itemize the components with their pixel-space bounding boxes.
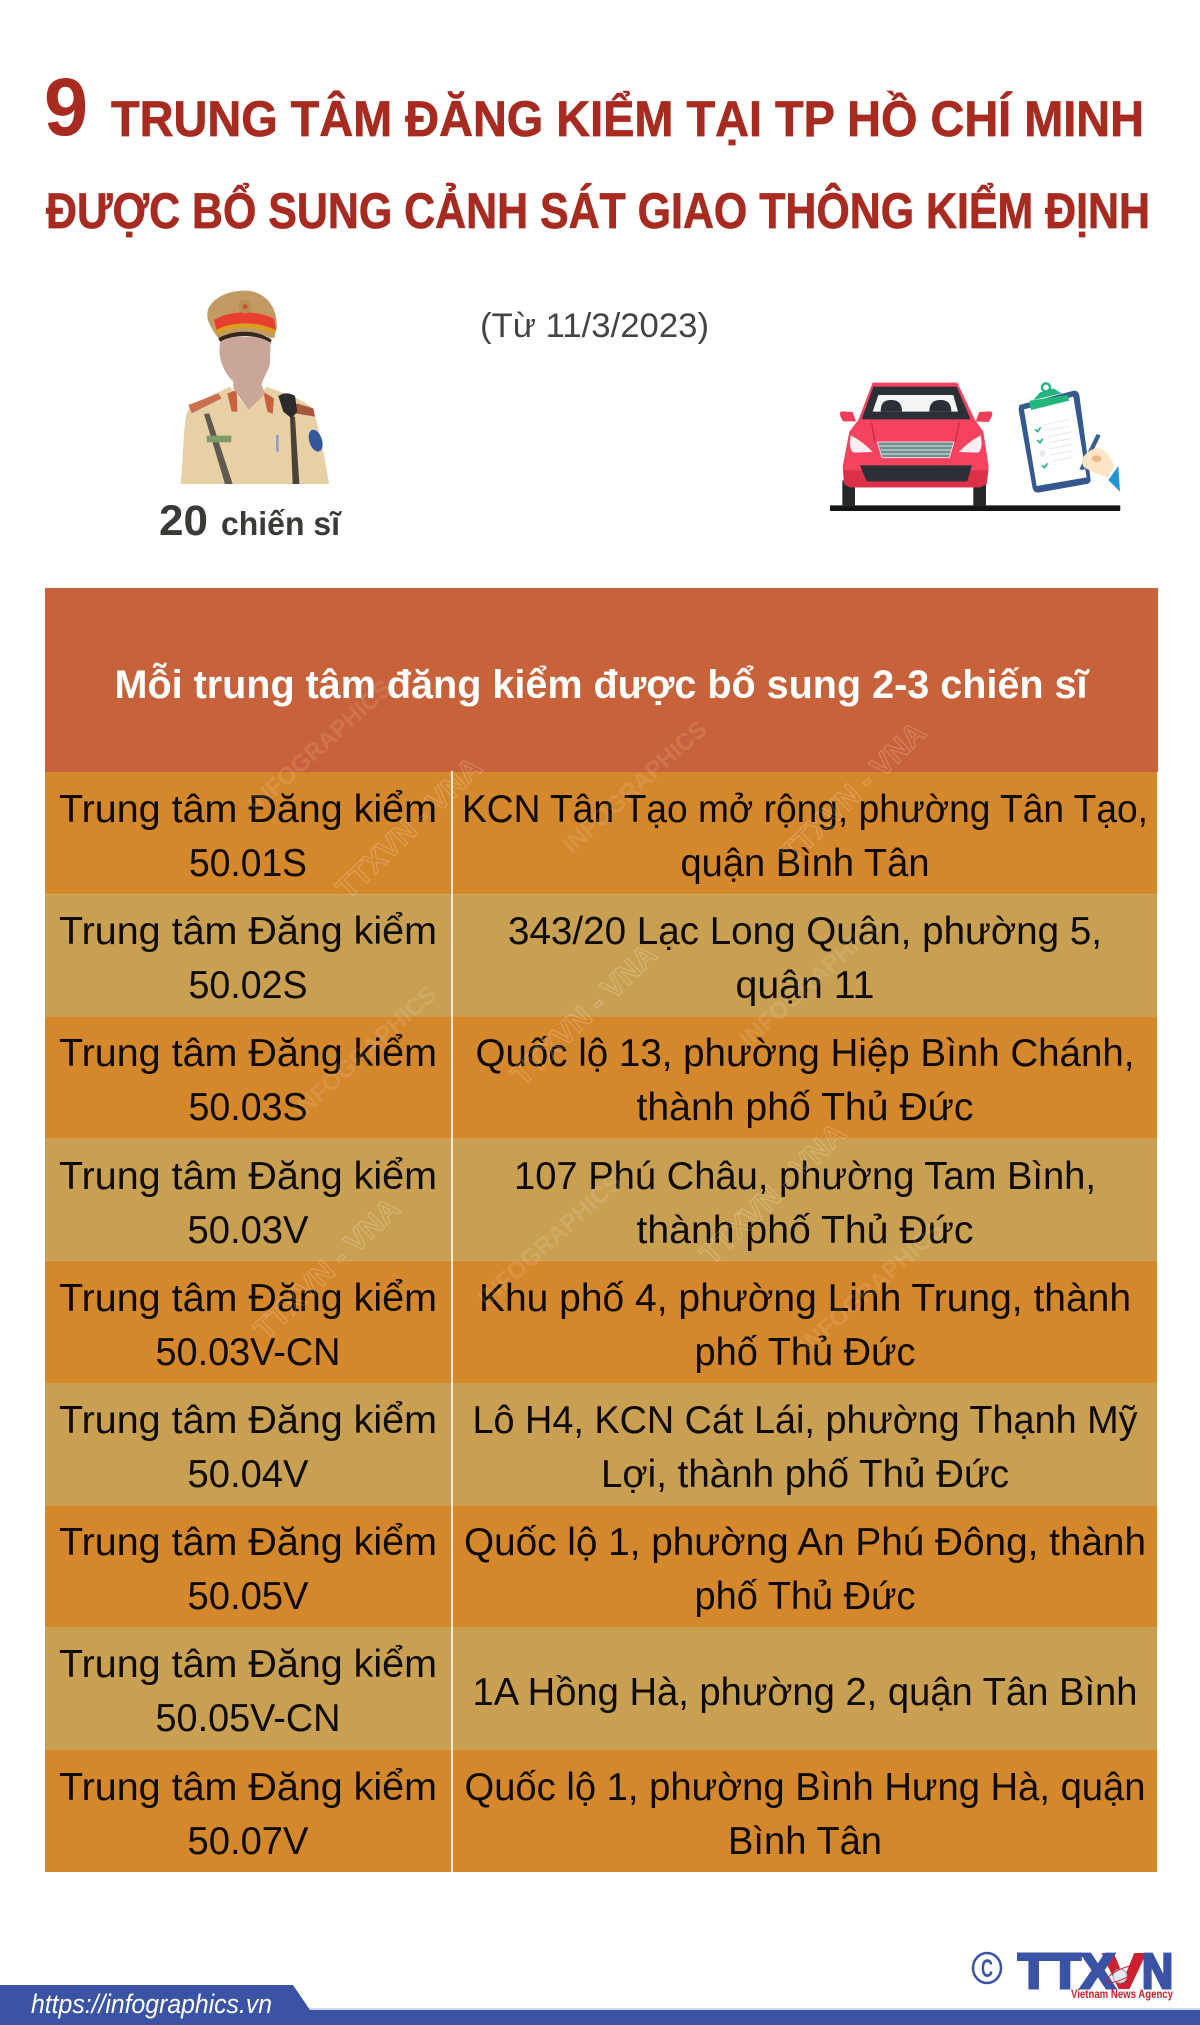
watermarks: TTXVN - VNA xyxy=(505,938,664,1092)
watermarks: INFOGRAPHICS xyxy=(288,981,442,1124)
row 7: phố Thủ Đức xyxy=(694,1575,916,1618)
row 7: Quốc lộ 1, phường An Phú Đông, thành xyxy=(464,1521,1146,1564)
row 2 xyxy=(45,894,1157,1016)
row 2: Trung tâm Đăng kiểm xyxy=(59,910,437,953)
row 4 xyxy=(45,1139,1157,1261)
row 3: Quốc lộ 13, phường Hiệp Bình Chánh, xyxy=(476,1032,1134,1075)
row 2: 50.02S xyxy=(188,964,308,1007)
row 1 xyxy=(45,772,1157,894)
row 4: Trung tâm Đăng kiểm xyxy=(59,1155,437,1198)
row 7 xyxy=(45,1505,1157,1627)
row 5: Khu phố 4, phường Linh Trung, thành xyxy=(479,1277,1131,1320)
row 4: thành phố Thủ Đức xyxy=(636,1209,974,1252)
logo: TTXVN Vietnam News Agency: V xyxy=(1103,1945,1145,1999)
row 6: Lô H4, KCN Cát Lái, phường Thạnh Mỹ xyxy=(472,1399,1138,1442)
watermarks xyxy=(243,675,949,1359)
row 6 xyxy=(45,1383,1157,1505)
logo: TTXVN Vietnam News Agency xyxy=(973,1945,1174,2001)
date text: (Từ 11/3/2023) xyxy=(480,307,709,345)
row 8: 50.05V-CN xyxy=(156,1697,340,1740)
icon: traffic police officer xyxy=(181,291,329,484)
row 9: 50.07V xyxy=(188,1820,308,1863)
watermarks: TTXVN - VNA xyxy=(330,751,489,905)
count: 20 chiến sĩ: chiến sĩ xyxy=(221,505,342,542)
row 4: 107 Phú Châu, phường Tam Bình, xyxy=(514,1155,1096,1198)
row 1: quận Bình Tân xyxy=(680,842,930,885)
footer band with url xyxy=(0,1985,1200,2025)
title: 9 xyxy=(44,62,88,153)
row 5 xyxy=(45,1261,1157,1383)
row 5: Trung tâm Đăng kiểm xyxy=(59,1277,437,1320)
row 9 xyxy=(45,1750,1157,1872)
row 5: 50.03V-CN xyxy=(156,1331,340,1374)
watermarks: TTXVN - VNA xyxy=(694,1117,853,1271)
row 9: Trung tâm Đăng kiểm xyxy=(59,1766,437,1809)
row 8: 1A Hồng Hà, phường 2, quận Tân Bình xyxy=(472,1671,1138,1714)
count: 20 chiến sĩ xyxy=(159,497,342,545)
row 1: KCN Tân Tạo mở rộng, phường Tân Tạo, xyxy=(462,788,1148,831)
row 9: Quốc lộ 1, phường Bình Hưng Hà, quận xyxy=(464,1766,1146,1809)
row 3: thành phố Thủ Đức xyxy=(636,1086,974,1129)
watermarks: INFOGRAPHICS xyxy=(473,1169,627,1312)
logo: TTXVN Vietnam News Agency: Vietnam News Agency xyxy=(1071,1989,1174,2001)
watermarks: INFOGRAPHICS xyxy=(795,1216,949,1359)
watermarks: INFOGRAPHICS xyxy=(558,716,712,859)
table xyxy=(45,772,1157,1872)
row 6: Trung tâm Đăng kiểm xyxy=(59,1399,437,1442)
icon: car and inspection checklist xyxy=(830,383,1120,511)
table header xyxy=(45,588,1158,772)
row 5: phố Thủ Đức xyxy=(694,1331,916,1374)
logo: TTXVN Vietnam News Agency: N xyxy=(1142,1945,1173,1999)
row 8: Trung tâm Đăng kiểm xyxy=(59,1643,437,1686)
watermarks: INFOGRAPHICS xyxy=(243,675,397,818)
table header: Mỗi trung tâm đăng kiểm được bổ sung 2-3 chiến sĩ xyxy=(114,661,1090,707)
row 4: 50.03V xyxy=(188,1209,308,1252)
row 1: Trung tâm Đăng kiểm xyxy=(59,788,437,831)
row 3: 50.03S xyxy=(188,1086,308,1129)
row 6: 50.04V xyxy=(188,1453,308,1496)
row 6: Lợi, thành phố Thủ Đức xyxy=(601,1453,1009,1496)
row 2: 343/20 Lạc Long Quân, phường 5, xyxy=(508,910,1102,953)
row 9: Bình Tân xyxy=(728,1820,882,1863)
watermarks: INFOGRAPHICS xyxy=(735,910,889,1053)
title: TRUNG TÂM ĐĂNG KIỂM TẠI TP HỒ CHÍ MINH xyxy=(111,91,1144,147)
row 8 xyxy=(45,1627,1157,1750)
logo: TTXVN Vietnam News Agency: C xyxy=(981,1955,993,1983)
count: 20 chiến sĩ: 20 xyxy=(159,497,208,545)
row 2: quận 11 xyxy=(736,964,874,1007)
row 3: Trung tâm Đăng kiểm xyxy=(59,1032,437,1075)
row 7: 50.05V xyxy=(188,1575,308,1618)
row 7: Trung tâm Đăng kiểm xyxy=(59,1521,437,1564)
footer band with url: https://infographics.vn xyxy=(31,1989,272,2019)
logo: TTXVN Vietnam News Agency: TTX xyxy=(1018,1945,1115,1999)
row 3 xyxy=(45,1016,1157,1139)
watermarks: TTXVN - VNA xyxy=(774,716,933,870)
row 1: 50.01S xyxy=(189,842,307,885)
watermarks: TTXVN - VNA xyxy=(248,1192,407,1346)
title xyxy=(44,62,1150,239)
